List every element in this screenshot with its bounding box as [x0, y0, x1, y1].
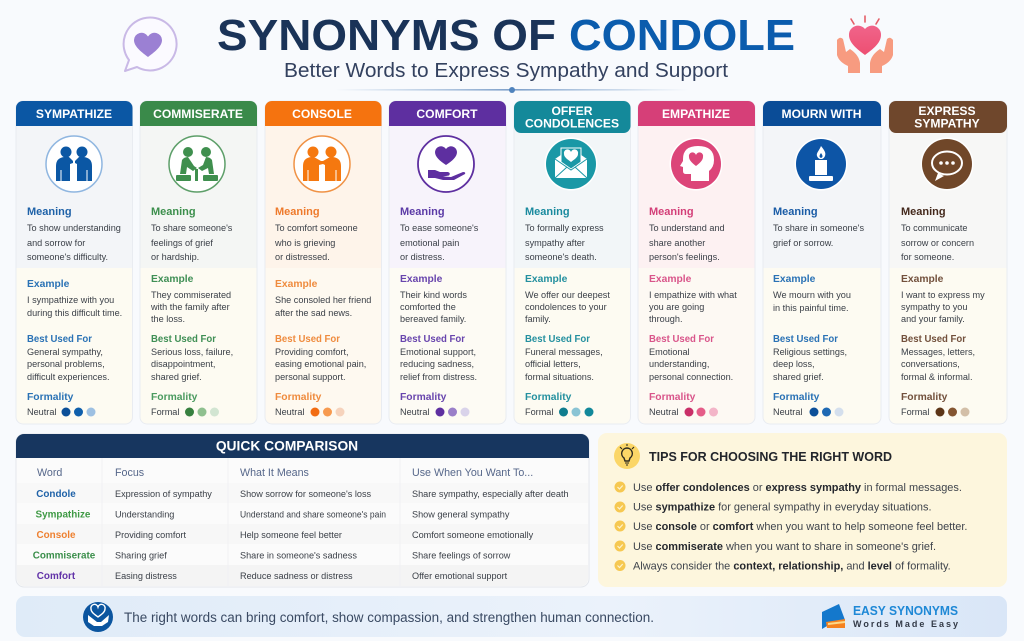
example: Example	[525, 274, 568, 285]
best used for	[901, 334, 975, 382]
formality	[649, 392, 718, 417]
meaning: Meaning	[525, 206, 570, 218]
header: CONSOLE	[292, 107, 352, 121]
best used for: Funeral messages,	[525, 347, 603, 357]
row: console: Help someone feel better	[240, 530, 342, 540]
row: console: Comfort someone emotionally	[412, 530, 534, 540]
icon: two people	[46, 136, 102, 192]
meaning: emotional pain	[400, 238, 459, 248]
formality: Formality	[151, 392, 198, 403]
row: commiserate: Sharing grief	[115, 550, 167, 560]
header	[389, 101, 506, 126]
meaning	[649, 206, 725, 262]
meaning: feelings of grief	[151, 238, 213, 248]
formality: Neutral	[400, 407, 429, 417]
formality: Neutral	[27, 407, 56, 417]
example: after the sad news.	[275, 308, 352, 318]
column headers: What It Means	[240, 467, 309, 479]
example: They commiserated	[151, 290, 231, 300]
best used for: difficult experiences.	[27, 372, 110, 382]
best used for: Best Used For	[525, 334, 590, 345]
panel: empathize	[638, 101, 755, 424]
icon: hand with heart	[418, 136, 474, 192]
best used for: personal connection.	[649, 372, 733, 382]
row: sympathize: Sympathize	[36, 510, 91, 520]
meaning: someone's difficulty.	[27, 252, 108, 262]
meaning: To comfort someone	[275, 223, 358, 233]
example: Example	[275, 279, 318, 290]
icon: hands and heart	[83, 602, 113, 632]
example: and your family.	[901, 314, 965, 324]
example: condolences to your	[525, 302, 607, 312]
example: with the family after	[150, 302, 230, 312]
example	[773, 274, 851, 313]
header: OFFER	[552, 104, 593, 118]
meaning: and sorrow for	[27, 238, 85, 248]
header	[265, 101, 382, 126]
meaning	[400, 206, 479, 262]
best used for: Best Used For	[400, 334, 465, 345]
meaning: who is grieving	[274, 238, 335, 248]
row: console: Providing comfort	[115, 530, 186, 540]
icon: people sharing grief	[169, 136, 225, 192]
tips heading: TIPS FOR CHOOSING THE RIGHT WORD	[649, 449, 892, 464]
meaning: share another	[649, 238, 705, 248]
meaning: Meaning	[773, 206, 818, 218]
best used for: conversations,	[901, 359, 960, 369]
example	[150, 274, 231, 324]
best used for: Messages, letters,	[901, 347, 975, 357]
best used for: relief from distress.	[400, 372, 477, 382]
example: in this painful time.	[773, 303, 849, 313]
table heading	[16, 434, 589, 458]
row: console	[37, 530, 534, 541]
title: SYNONYMS OF	[217, 11, 556, 60]
example: Example	[901, 274, 944, 285]
best used for: Emotional support,	[400, 347, 476, 357]
row: sympathize: Understand and share someone's pain	[240, 510, 386, 520]
header: EXPRESS	[918, 104, 976, 118]
best used for: Emotional	[649, 347, 690, 357]
example: through.	[649, 314, 682, 324]
best used for: Best Used For	[275, 334, 340, 345]
example: Example	[649, 274, 692, 285]
tip 5: Always consider the context, relationship, and level of formality.	[633, 560, 951, 572]
example	[525, 274, 610, 324]
formality	[400, 392, 470, 417]
icon: light bulb	[614, 443, 640, 469]
best used for: deep loss,	[773, 359, 815, 369]
header: SYMPATHIZE	[36, 107, 112, 121]
formality: Formality	[773, 392, 820, 403]
meaning: To communicate	[901, 223, 967, 233]
meaning: Meaning	[151, 206, 196, 218]
example: Example	[400, 274, 443, 285]
header: EMPATHIZE	[662, 107, 730, 121]
meaning: To show understanding	[27, 223, 121, 233]
panel: console	[265, 101, 382, 424]
best used for: personal support.	[275, 372, 346, 382]
row: commiserate: Share feelings of sorrow	[412, 550, 511, 560]
best used for: Providing comfort,	[275, 347, 349, 357]
meaning: To ease someone's	[400, 223, 479, 233]
panel: tips	[598, 433, 1007, 587]
row: condole: Show sorrow for someone's loss	[240, 489, 372, 499]
example: Example	[151, 274, 194, 285]
best used for	[27, 334, 110, 382]
row: condole: Share sympathy, especially after death	[412, 489, 569, 499]
best used for: Religious settings,	[773, 347, 847, 357]
formality: Formality	[275, 392, 322, 403]
column headers: Word	[37, 467, 62, 479]
row: sympathize	[36, 510, 510, 520]
best used for	[400, 334, 477, 382]
meaning: sympathy after	[525, 238, 585, 248]
formality: Neutral	[275, 407, 304, 417]
icon: envelope with heart	[544, 138, 598, 190]
best used for: shared grief.	[773, 372, 824, 382]
best used for: Best Used For	[773, 334, 838, 345]
panel: express sympathy	[889, 101, 1007, 424]
meaning: To share someone's	[151, 223, 233, 233]
example: comforted the	[400, 302, 456, 312]
formality: Formality	[525, 392, 572, 403]
best used for: Best Used For	[27, 334, 92, 345]
best used for: General sympathy,	[27, 347, 103, 357]
example: I empathize with what	[649, 290, 737, 300]
icon: hands holding heart	[837, 16, 893, 73]
header: SYMPATHY	[914, 116, 980, 130]
best used for: formal & informal.	[901, 372, 972, 382]
meaning	[27, 206, 121, 262]
header	[889, 101, 1007, 133]
column headers	[37, 467, 533, 479]
tip 1: Use offer condolences or express sympathy in formal messages.	[633, 482, 962, 494]
meaning: or distressed.	[275, 252, 330, 262]
example: Example	[773, 274, 816, 285]
icon: speech bubble with dots	[920, 138, 974, 190]
header	[16, 101, 132, 126]
formality: Formal	[151, 407, 179, 417]
logo: easy synonyms: EASY SYNONYMS	[853, 604, 958, 618]
row: commiserate: Share in someone's sadness	[240, 550, 357, 560]
meaning: or distress.	[400, 252, 445, 262]
meaning	[525, 206, 604, 262]
example	[901, 274, 985, 324]
header: COMFORT	[416, 107, 478, 121]
best used for: easing emotional pain,	[275, 359, 366, 369]
best used for: Best Used For	[901, 334, 966, 345]
row: sympathize: Show general sympathy	[412, 510, 510, 520]
column headers: Use When You Want To...	[412, 467, 533, 479]
row: comfort	[37, 571, 508, 582]
panel: sympathize	[16, 101, 132, 424]
best used for: Best Used For	[151, 334, 216, 345]
formality	[151, 392, 219, 417]
tip 4: Use commiserate when you want to share in someone's grief.	[633, 541, 936, 553]
row: condole: Expression of sympathy	[115, 489, 212, 499]
meaning: sorrow or concern	[901, 238, 974, 248]
meaning: Meaning	[27, 206, 72, 218]
header	[638, 101, 755, 126]
best used for: Best Used For	[649, 334, 714, 345]
best used for: understanding,	[649, 359, 709, 369]
panel: quick comparison	[16, 434, 589, 587]
row: comfort: Reduce sadness or distress	[240, 571, 353, 581]
best used for	[275, 334, 366, 382]
subtitle: Better Words to Express Sympathy and Support	[284, 60, 728, 82]
logo: easy synonyms: Words Made Easy	[853, 619, 958, 629]
example: sympathy to you	[901, 302, 967, 312]
meaning: for someone.	[901, 252, 954, 262]
example: Their kind words	[400, 290, 467, 300]
row: console: Console	[37, 530, 76, 541]
best used for: reducing sadness,	[400, 359, 474, 369]
example: you are going	[649, 302, 704, 312]
panel: mourn with	[763, 101, 881, 424]
meaning: Meaning	[649, 206, 694, 218]
row: comfort: Easing distress	[115, 571, 177, 581]
formality: Formality	[649, 392, 696, 403]
row: commiserate: Commiserate	[33, 550, 96, 562]
meaning: To share in someone's	[773, 223, 864, 233]
formality: Neutral	[773, 407, 802, 417]
formality	[275, 392, 344, 417]
example: She consoled her friend	[275, 295, 371, 305]
best used for	[525, 334, 603, 382]
formality	[901, 392, 970, 417]
header	[763, 101, 881, 126]
best used for: personal problems,	[27, 359, 105, 369]
header: MOURN WITH	[782, 107, 861, 121]
formality	[27, 392, 96, 417]
row: comfort: Offer emotional support	[412, 571, 508, 581]
example: during this difficult time.	[27, 308, 122, 318]
best used for: disappointment,	[151, 359, 215, 369]
header	[514, 101, 631, 133]
formality: Formality	[400, 392, 447, 403]
example: family.	[525, 314, 551, 324]
meaning: To understand and	[649, 223, 725, 233]
meaning: person's feelings.	[649, 252, 720, 262]
example	[275, 279, 371, 318]
header: CONDOLENCES	[525, 116, 619, 130]
panel: offer condolences	[514, 101, 631, 424]
panel: commiserate	[140, 101, 257, 424]
meaning: someone's death.	[525, 252, 597, 262]
example: I sympathize with you	[27, 295, 114, 305]
icon: head with heart	[670, 138, 722, 190]
title	[217, 11, 795, 60]
divider	[335, 87, 689, 93]
meaning: or hardship.	[151, 252, 199, 262]
banner	[16, 596, 1007, 637]
header	[140, 101, 257, 126]
row: commiserate	[33, 550, 511, 562]
formality: Neutral	[649, 407, 678, 417]
best used for: Serious loss, failure,	[151, 347, 233, 357]
best used for: shared grief.	[151, 372, 202, 382]
best used for: formal situations.	[525, 372, 594, 382]
row: condole	[36, 489, 569, 500]
example: We offer our deepest	[525, 290, 610, 300]
row: sympathize: Understanding	[115, 510, 174, 520]
example: We mourn with you	[773, 290, 851, 300]
best used for	[773, 334, 847, 382]
message: The right words can bring comfort, show compassion, and strengthen human connection.	[124, 610, 654, 625]
panel: comfort	[389, 101, 506, 424]
formality: Formality	[901, 392, 948, 403]
example: Example	[27, 279, 70, 290]
best used for: official letters,	[525, 359, 581, 369]
formality	[773, 392, 844, 417]
table heading: QUICK COMPARISON	[216, 438, 358, 454]
best used for	[151, 334, 233, 382]
tip 2: Use sympathize for general sympathy in everyday situations.	[633, 502, 932, 514]
example	[649, 274, 737, 324]
formality: Formal	[525, 407, 553, 417]
meaning: grief or sorrow.	[773, 238, 833, 248]
formality	[525, 392, 594, 417]
header: COMMISERATE	[153, 107, 243, 121]
icon: speech bubble with heart	[124, 17, 177, 71]
example	[27, 279, 122, 318]
row: condole: Condole	[36, 489, 76, 500]
icon: candle	[794, 138, 848, 190]
logo: easy synonyms	[822, 604, 958, 629]
meaning	[773, 206, 864, 248]
meaning: Meaning	[275, 206, 320, 218]
column headers: Focus	[115, 467, 144, 479]
title: CONDOLE	[569, 11, 795, 60]
example	[400, 274, 467, 324]
example: I want to express my	[901, 290, 985, 300]
example: the loss.	[151, 314, 185, 324]
tip 3: Use console or comfort when you want to help someone feel better.	[633, 521, 967, 533]
formality: Formality	[27, 392, 74, 403]
meaning: Meaning	[400, 206, 445, 218]
best used for	[649, 334, 733, 382]
icon: two people consoling	[294, 136, 350, 192]
meaning	[901, 206, 974, 262]
formality: Formal	[901, 407, 929, 417]
meaning	[151, 206, 233, 262]
example: bereaved family.	[400, 314, 466, 324]
meaning: Meaning	[901, 206, 946, 218]
row: comfort: Comfort	[37, 571, 76, 582]
meaning: To formally express	[525, 223, 604, 233]
meaning	[274, 206, 358, 262]
